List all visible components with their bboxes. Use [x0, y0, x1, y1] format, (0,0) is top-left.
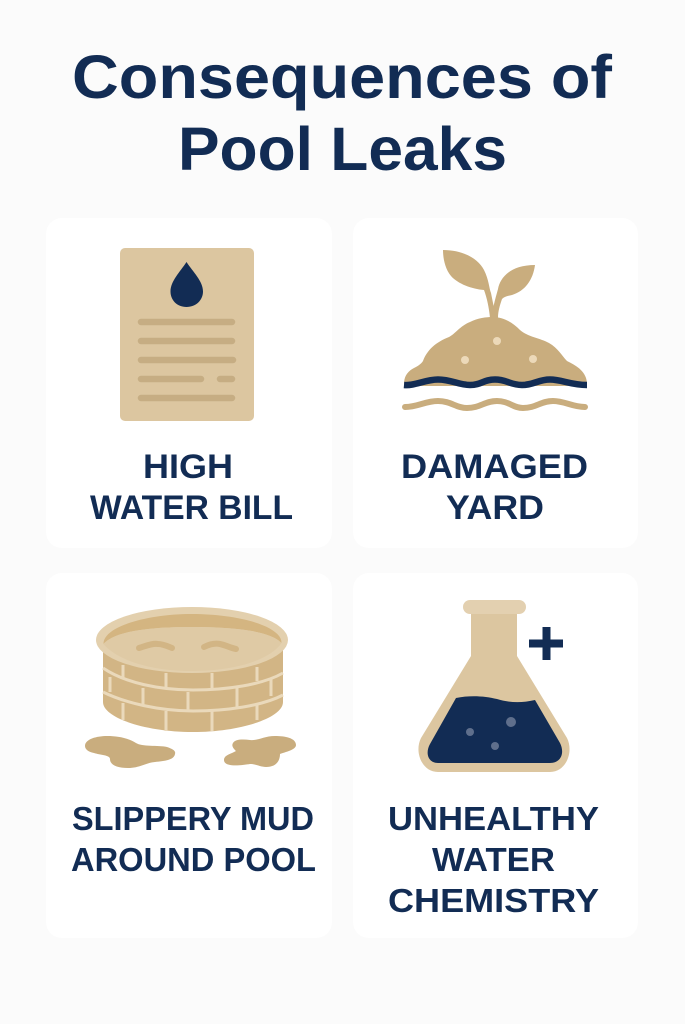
label: high water bill: WATER BILL: [90, 489, 293, 527]
panel: damaged yard: [353, 218, 638, 548]
panel: high water bill: [46, 218, 332, 548]
label: high water bill: [90, 448, 293, 527]
icon: water bill document: [120, 248, 254, 421]
label: damaged yard: YARD: [446, 489, 544, 527]
title: [72, 43, 613, 183]
label: unhealthy water chemistry: WATER: [432, 842, 555, 879]
panel: unhealthy water chemistry: [353, 573, 638, 938]
label: unhealthy water chemistry: CHEMISTRY: [388, 883, 599, 920]
label: damaged yard: DAMAGED: [401, 448, 588, 486]
label: slippery mud around pool: [71, 801, 316, 879]
icon: brick pool with mud puddles: [85, 607, 296, 768]
panel: slippery mud around pool: [46, 573, 332, 938]
icon: chemistry flask: [418, 600, 570, 772]
label: unhealthy water chemistry: [388, 801, 599, 920]
label: unhealthy water chemistry: UNHEALTHY: [388, 801, 599, 838]
title: Pool Leaks: [178, 115, 507, 183]
icon: eroded soil with sprout: [404, 250, 587, 408]
label: slippery mud around pool: SLIPPERY MUD: [72, 801, 314, 838]
label: high water bill: HIGH: [143, 448, 233, 486]
label: damaged yard: [401, 448, 588, 527]
title: Consequences of: [72, 43, 613, 111]
label: slippery mud around pool: AROUND POOL: [71, 842, 316, 879]
